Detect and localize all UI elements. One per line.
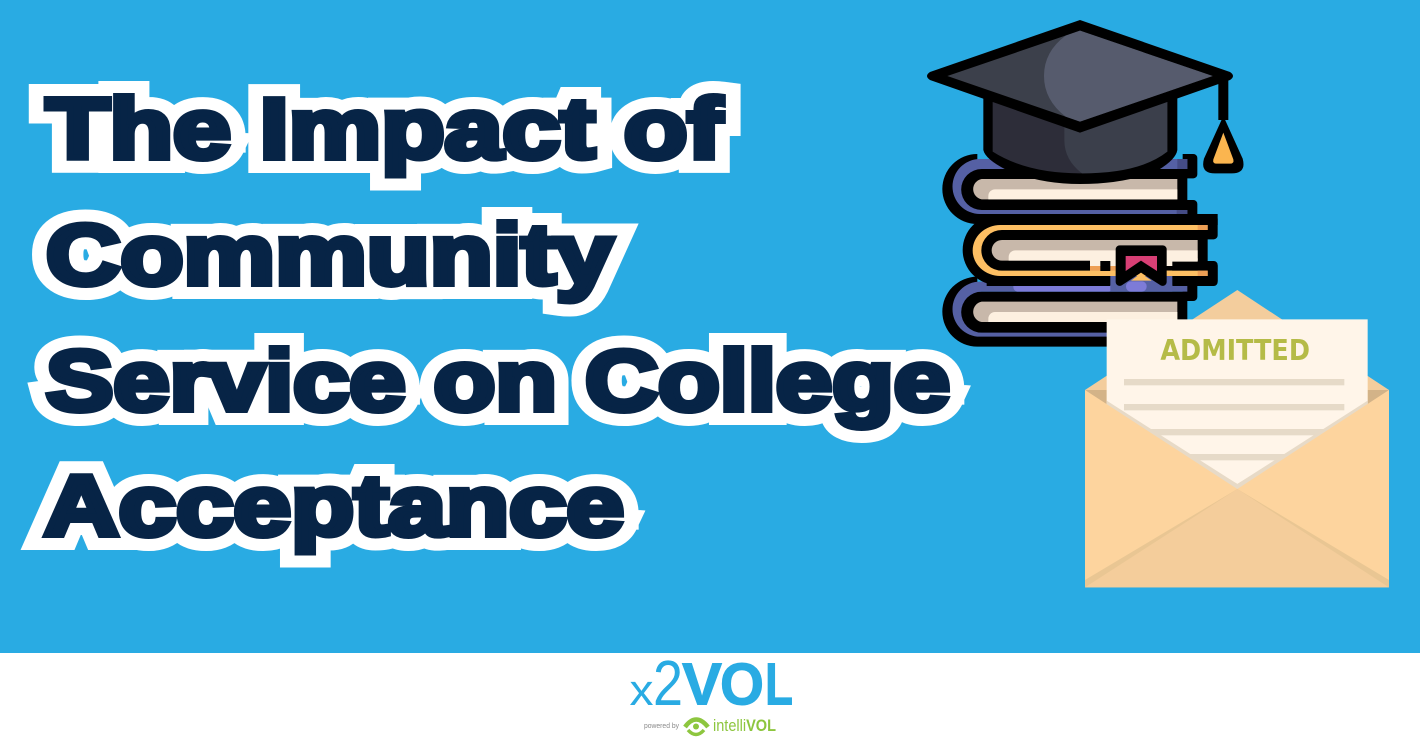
icon: envelope with admission letter — [1085, 290, 1389, 587]
logo wordmark — [630, 647, 793, 719]
icon: cap body — [983, 93, 1177, 184]
title: Acceptance — [44, 459, 624, 554]
envelope front shadow — [1107, 401, 1368, 492]
icon: middle book — [963, 215, 1218, 285]
icon: bottom book — [942, 277, 1197, 347]
title: Service on College — [46, 334, 950, 429]
title: Acceptance — [44, 459, 624, 554]
title: Community — [46, 208, 613, 303]
title: Service on College — [46, 334, 950, 429]
icon: graduation cap on stack of books — [927, 20, 1244, 347]
title: The Impact of — [46, 82, 723, 177]
letter lines — [1124, 379, 1344, 460]
icon: top book — [942, 154, 1197, 224]
envelope bottom flap — [1085, 489, 1389, 587]
logo wordmark: O — [720, 652, 764, 718]
icon: mortarboard — [927, 20, 1233, 133]
logo wordmark: 2 — [653, 647, 683, 719]
icon: tassel — [1203, 77, 1244, 173]
letter heading: ADMITTED — [1160, 334, 1310, 367]
intelliVOL wordmark: intelliVOL — [713, 716, 776, 735]
envelope inner shadow — [1085, 390, 1389, 420]
envelope front — [1085, 390, 1389, 587]
logo wordmark: V — [682, 652, 722, 718]
footer band — [0, 653, 1420, 746]
logo wordmark: x — [630, 666, 654, 715]
title: The Impact of — [46, 82, 723, 177]
icon: intelliVOL eye — [685, 720, 708, 734]
title: Community — [46, 208, 613, 303]
powered by label: powered by — [644, 723, 679, 730]
title — [44, 82, 950, 554]
logo wordmark: L — [765, 652, 793, 718]
admission letter — [1107, 319, 1368, 484]
icon: bookmark ribbon — [1116, 245, 1167, 286]
envelope back — [1085, 290, 1389, 587]
logo: x2VOL powered by intelliVOL — [630, 647, 793, 735]
